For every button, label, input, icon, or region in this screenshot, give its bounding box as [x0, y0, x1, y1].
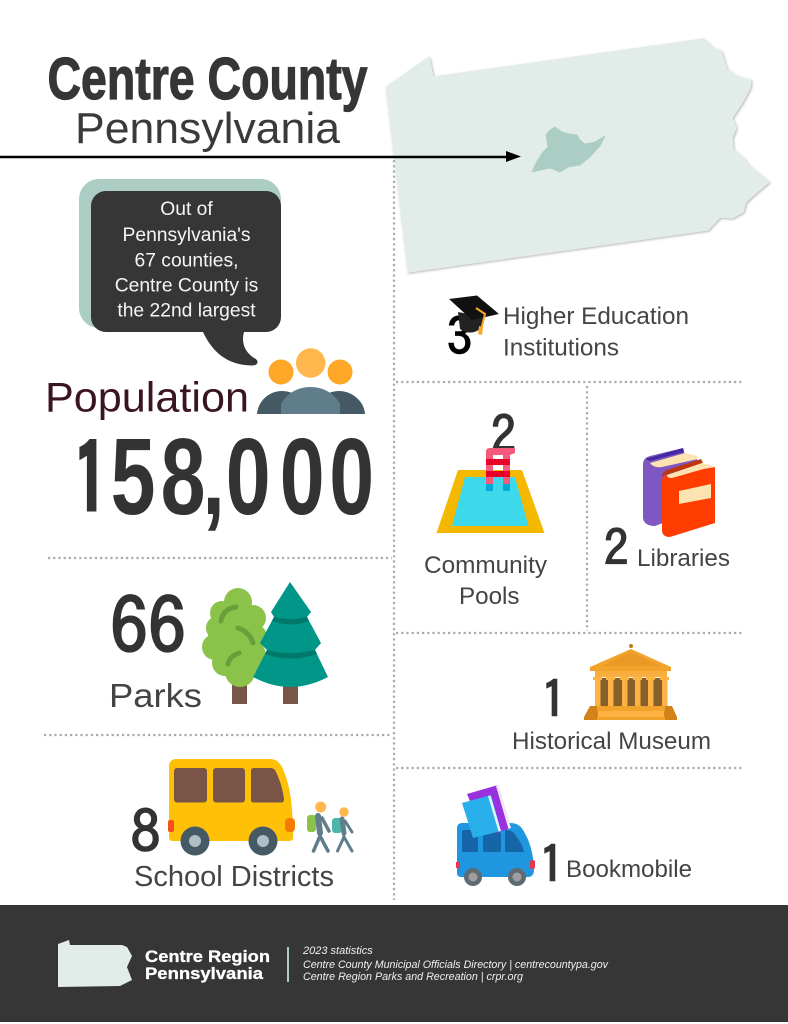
stat: community pools: Community — [424, 552, 548, 579]
stat: historical museum — [512, 644, 711, 755]
title: Centre County — [48, 46, 368, 112]
callout: county rank: Out of — [160, 199, 213, 220]
footer brand name — [145, 947, 270, 983]
footer map icon — [58, 940, 132, 987]
icon: students walking — [307, 802, 352, 851]
icon: graduation cap — [449, 296, 499, 335]
stat: historical museum: Historical Museum — [512, 728, 711, 755]
stat: parks: 66 — [110, 588, 186, 664]
footer sources: Centre County Municipal Officials Directory | centrecountypa.gov — [303, 959, 609, 971]
stat: higher education: 3 — [447, 312, 472, 362]
stat: school districts: 8 — [131, 802, 160, 860]
footer band — [0, 905, 788, 1022]
stat: libraries: 2 — [604, 523, 628, 572]
callout: county rank: Centre County is — [115, 276, 258, 296]
stat: higher education — [447, 296, 689, 362]
stat: higher education: Higher Education — [503, 303, 689, 330]
stat: bookmobile — [456, 785, 692, 890]
footer sources — [302, 945, 609, 983]
population number: 58,000 — [111, 416, 374, 538]
icon: school bus — [168, 759, 295, 856]
stat: parks — [109, 582, 328, 714]
stat: school districts: School Districts — [134, 861, 334, 893]
stat: historical museum: 1 — [541, 674, 566, 725]
icon: swimming pool — [436, 448, 544, 533]
stat: libraries — [604, 448, 730, 572]
stat: bookmobile: Bookmobile — [566, 856, 692, 883]
callout: county rank: Pennsylvania's — [122, 225, 251, 246]
population number: 1 — [73, 431, 108, 527]
stat: school districts — [131, 759, 352, 893]
stat: libraries: Libraries — [637, 545, 730, 572]
stat: community pools: 2 — [491, 410, 516, 460]
population label: Population — [45, 374, 249, 420]
stat: parks: Parks — [109, 677, 202, 714]
stat: higher education: Institutions — [503, 334, 619, 362]
title: Pennsylvania — [75, 104, 341, 153]
arrow to county — [0, 151, 521, 162]
icon: people — [257, 348, 365, 414]
stat: community pools: Pools — [459, 583, 520, 610]
icon: books — [643, 448, 715, 537]
icon: trees — [202, 582, 328, 704]
icon: museum building — [584, 644, 677, 720]
callout: county rank: 67 counties, — [135, 250, 238, 272]
icon: bookmobile van with books — [456, 785, 535, 886]
title — [48, 46, 368, 153]
footer brand name: Centre Region — [145, 947, 270, 966]
stat: bookmobile: 1 — [539, 839, 564, 890]
footer sources: Centre Region Parks and Recreation | crpr.org — [303, 971, 524, 983]
map: Pennsylvania with Centre County — [386, 39, 769, 272]
callout: county rank — [79, 179, 281, 366]
footer sources: 2023 statistics — [302, 945, 373, 957]
callout: county rank: the 22nd largest — [117, 300, 256, 322]
footer brand name: Pennsylvania — [145, 964, 264, 983]
stat: community pools — [424, 410, 548, 610]
